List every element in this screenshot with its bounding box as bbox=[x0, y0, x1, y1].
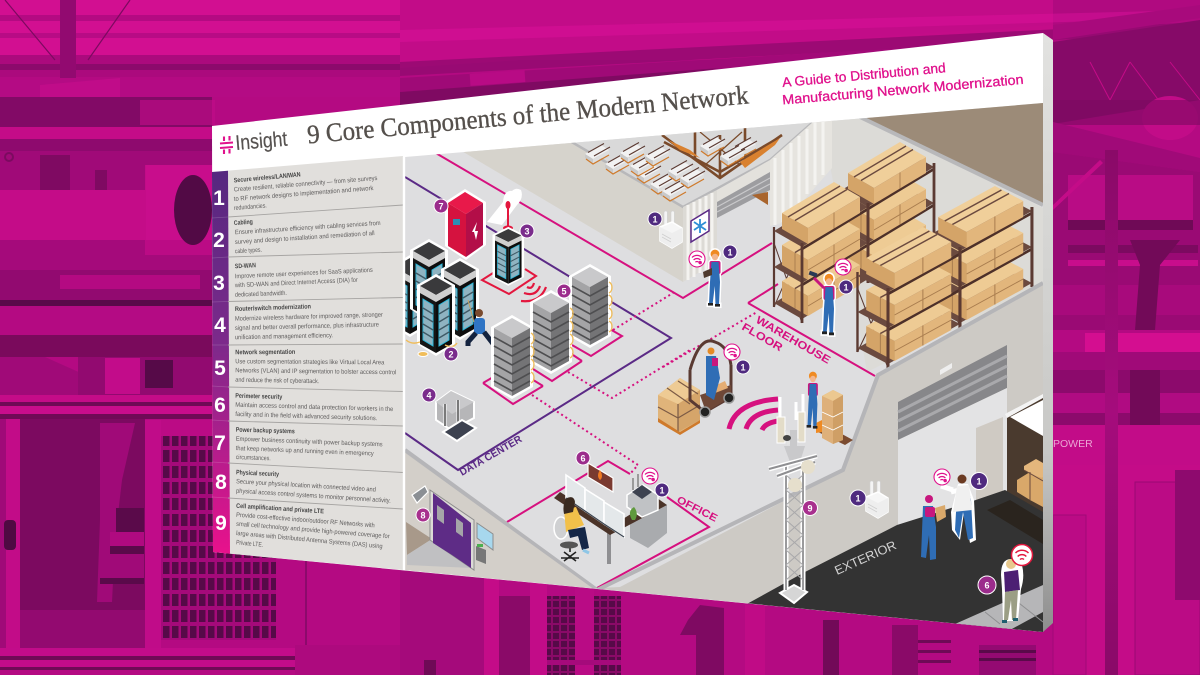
icon: logo mark bbox=[220, 136, 233, 154]
badge 7: 7 bbox=[438, 201, 444, 211]
wifi bubbles bbox=[642, 251, 950, 485]
badges 1: 1 bbox=[652, 214, 658, 224]
subtitle: Manufacturing Network Modernization bbox=[782, 72, 1024, 107]
badge 6 office: 6 bbox=[580, 453, 586, 463]
item 3: dedicated bandwidth. bbox=[235, 290, 287, 299]
item 1: redundancies. bbox=[234, 202, 267, 212]
forklift with pallet bbox=[658, 341, 734, 435]
truck bbox=[1005, 394, 1043, 515]
item 8: physical access control systems to monitor personnel activity. bbox=[236, 488, 391, 505]
door area bbox=[406, 486, 493, 570]
badge 2: 2 bbox=[448, 349, 454, 359]
exterior wall with shutter bbox=[898, 345, 1007, 526]
badge 9 bbox=[802, 500, 818, 516]
worker with tablet bbox=[703, 250, 720, 307]
item 1: Create resilient, reliable connectivity — from site surveys bbox=[234, 175, 378, 193]
badge 2 bbox=[444, 347, 458, 361]
red box under router bbox=[482, 269, 536, 294]
item 4: signal and better overall performance, plus infrastructure bbox=[235, 321, 379, 332]
badges 1 bbox=[648, 212, 988, 506]
badges 1: 1 bbox=[727, 247, 733, 257]
subtitle: A Guide to Distribution and bbox=[782, 60, 946, 90]
badge 6 exterior: 6 bbox=[984, 580, 990, 590]
asphalt bbox=[745, 490, 1043, 640]
item 7: 7 bbox=[214, 432, 226, 455]
office label: OFFICE bbox=[675, 494, 719, 525]
board side edge bbox=[1043, 33, 1053, 632]
item 6: facility and in the field with advanced security solutions. bbox=[235, 411, 378, 422]
item 3: Improve remote user experiences for SaaS applications bbox=[235, 267, 373, 280]
firewall bbox=[588, 463, 613, 492]
red wifi waves bbox=[521, 283, 546, 301]
item 2: survey and design to installation and remediation of all bbox=[235, 230, 375, 246]
item 6: Perimeter security bbox=[235, 393, 283, 401]
item 8: 8 bbox=[215, 471, 227, 494]
item 5: 5 bbox=[214, 357, 226, 380]
item 9: Private LTE. bbox=[236, 539, 264, 549]
icon: router with antennas bbox=[436, 391, 476, 441]
item 6: Maintain access control and data protection for workers in the bbox=[235, 402, 394, 413]
item 2: Cabling bbox=[234, 219, 253, 227]
badges 1: 1 bbox=[659, 485, 665, 495]
office desk with monitors bbox=[554, 463, 667, 564]
item 2: 2 bbox=[213, 229, 225, 252]
warehouse floor label: FLOOR bbox=[740, 321, 785, 354]
item 7: circumstances. bbox=[236, 454, 271, 462]
numbered gradient strip bbox=[212, 171, 230, 554]
item 4: Router/switch modernization bbox=[235, 303, 311, 313]
exterior lower ground and walls bbox=[405, 283, 1043, 640]
technician kneeling bbox=[466, 300, 491, 346]
warehouse floor label bbox=[742, 316, 831, 364]
badges 1: 1 bbox=[740, 362, 746, 372]
subtitle bbox=[782, 60, 1024, 107]
badge 8: 8 bbox=[420, 510, 426, 520]
server stacks bbox=[491, 264, 612, 399]
item 9: small cell technology and provide high-powered coverage for bbox=[236, 521, 391, 540]
sidewalk bbox=[955, 585, 1043, 630]
POWER sign text in background: POWER bbox=[1053, 438, 1093, 450]
badge 4: 4 bbox=[426, 390, 432, 400]
panel: component list bbox=[212, 156, 403, 570]
white wireless access points bbox=[660, 211, 888, 518]
badge 6 exterior bbox=[978, 576, 996, 594]
door bbox=[976, 417, 1003, 503]
badge 6 office bbox=[576, 451, 590, 465]
warehouse rack rows bbox=[774, 142, 1032, 368]
badge 3: 3 bbox=[524, 226, 530, 236]
woman with phone bbox=[1001, 559, 1023, 623]
item 8: Physical security bbox=[236, 469, 279, 478]
badge 9: 9 bbox=[807, 503, 813, 513]
logo: Insight bbox=[220, 128, 288, 155]
badge 5 bbox=[557, 284, 571, 298]
item 2 bbox=[213, 219, 381, 255]
item 6: 6 bbox=[214, 394, 226, 417]
floor bbox=[405, 100, 1045, 640]
item 9: 9 bbox=[215, 512, 227, 535]
tower bbox=[769, 394, 817, 603]
item 9: Provide cost-effective indoor/outdoor RF Networks with bbox=[236, 512, 375, 529]
item 3: SD-WAN bbox=[235, 262, 256, 270]
item 5: and reduce the risk of cyberattack. bbox=[235, 377, 320, 385]
logo: Insight: Insight bbox=[234, 128, 288, 155]
item 3: with SD-WAN and Direct Internet Access (DIA) for bbox=[234, 277, 359, 289]
wifi arcs magenta bbox=[729, 399, 778, 430]
taupe roof area bbox=[860, 100, 1045, 206]
title: 9 Core Components of the Modern Network bbox=[306, 79, 750, 149]
item 7: Power backup systems bbox=[236, 427, 295, 435]
worker with scanner bbox=[809, 271, 834, 335]
item 2: cable types. bbox=[235, 247, 262, 255]
item 1: 1 bbox=[213, 187, 225, 210]
item 8: Secure your physical location with connected video and bbox=[236, 478, 376, 494]
badges 1: 1 bbox=[855, 493, 861, 503]
item 1: to RF network designs to implementation and network bbox=[234, 185, 374, 203]
item 6 bbox=[214, 393, 394, 422]
data center racks bbox=[405, 239, 479, 357]
item 1 bbox=[213, 171, 378, 212]
badge 3 bbox=[520, 224, 534, 238]
item 9: Cell amplification and private LTE bbox=[236, 503, 325, 515]
warehouse back wall bbox=[830, 116, 1043, 372]
purple data center line bbox=[405, 177, 671, 470]
snowflake frame bbox=[691, 210, 709, 242]
courier and manager bbox=[921, 474, 976, 560]
item 5 bbox=[214, 349, 396, 385]
board: poster front face bbox=[212, 33, 1045, 640]
item 1: Secure wireless/LAN/WAN bbox=[234, 171, 301, 184]
item 4: 4 bbox=[214, 314, 226, 337]
item 9: large areas with Distributed Antenna Systems (DAS) using bbox=[236, 530, 383, 550]
data center label: DATA CENTER bbox=[458, 433, 524, 479]
item 8 bbox=[215, 469, 391, 505]
item 9 bbox=[215, 503, 391, 550]
number badges bbox=[416, 199, 996, 594]
white panel divider bbox=[403, 156, 405, 570]
printer router bbox=[627, 474, 658, 517]
item 5: Use custom segmentation strategies like Virtual Local Area bbox=[235, 358, 385, 366]
warehouse floor label: WAREHOUSE bbox=[754, 314, 832, 367]
cloud and red antenna bbox=[487, 189, 522, 230]
badge 4 bbox=[422, 388, 436, 402]
badges 1: 1 bbox=[976, 476, 982, 486]
item 4: Modernize wireless hardware for improved range, stronger bbox=[235, 312, 384, 323]
item 7 bbox=[214, 427, 383, 462]
item 2: Ensure infrastructure efficiency with cabling services from bbox=[235, 220, 381, 236]
item 5: Networks (VLAN) and IP segmentation to bolster access control bbox=[235, 367, 396, 376]
icon: security camera bbox=[412, 486, 428, 503]
office worker in chair bbox=[554, 497, 589, 561]
beige data center wall bbox=[460, 140, 683, 282]
corrugated curtain and dock wall bbox=[683, 120, 832, 282]
panel: isometric facility illustration bbox=[391, 100, 1045, 640]
icon: SD-WAN black unit bbox=[493, 227, 524, 286]
wifi bubble red bbox=[1012, 544, 1032, 566]
badge 8 bbox=[416, 508, 430, 522]
item 5: Network segmentation bbox=[235, 349, 295, 356]
badge 7 bbox=[434, 199, 448, 213]
item 7: Empower business continuity with power backup systems bbox=[236, 436, 383, 448]
exterior label: EXTERIOR bbox=[833, 538, 899, 578]
dotted links bbox=[532, 293, 757, 474]
item 7: that keep networks up and running even in emergency bbox=[236, 445, 375, 458]
UPS red cabinet bbox=[445, 189, 486, 260]
item 3 bbox=[213, 262, 373, 299]
magenta network lines bbox=[434, 152, 875, 588]
item 3: 3 bbox=[213, 272, 225, 295]
back room with white pallets bbox=[570, 120, 813, 207]
pallet jack worker bbox=[807, 372, 853, 445]
item 4 bbox=[214, 303, 384, 341]
badges 1: 1 bbox=[843, 282, 849, 292]
item 4: unification and management efficiency. bbox=[235, 332, 333, 341]
badge 5: 5 bbox=[561, 286, 567, 296]
